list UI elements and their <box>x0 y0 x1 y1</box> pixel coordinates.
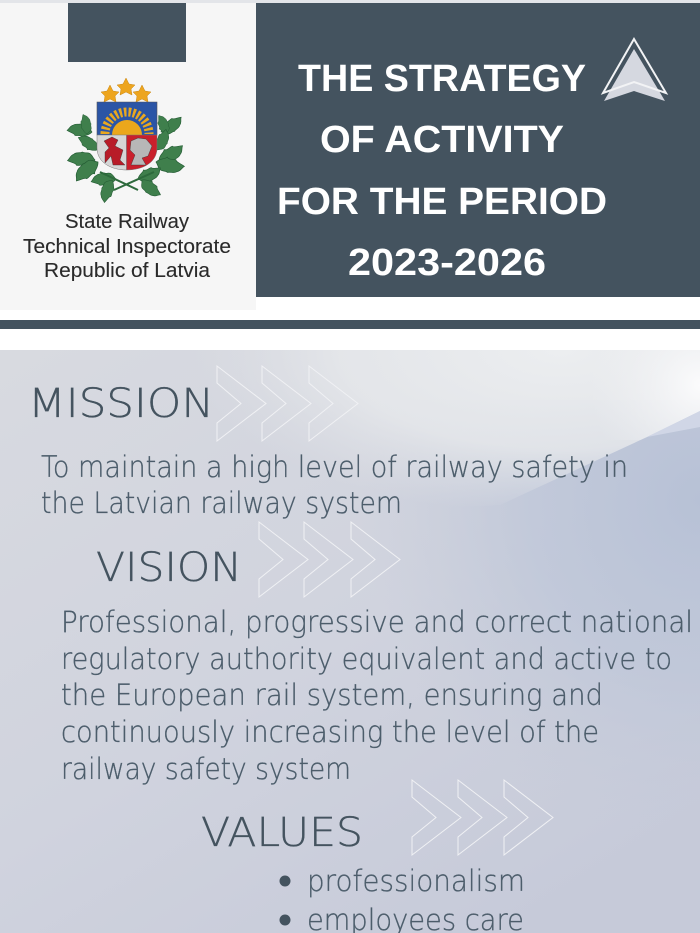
mission section <box>28 366 628 520</box>
icon: arrow <box>603 39 666 101</box>
oak branches <box>66 114 186 204</box>
shield blue field <box>97 102 157 135</box>
vision section <box>61 522 693 786</box>
title: FOR THE PERIOD <box>277 181 607 223</box>
heading: vision: VISION <box>96 545 242 591</box>
values section <box>201 780 553 933</box>
organisation name: Republic of Latvia <box>44 260 211 282</box>
shield red quarter <box>126 135 157 170</box>
title: OF ACTIVITY <box>320 119 564 161</box>
vision text: railway safety system <box>61 752 351 786</box>
organisation name <box>23 211 231 282</box>
panel: strategy content <box>0 350 700 933</box>
organisation name: Technical Inspectorate <box>23 236 231 258</box>
mission text: the Latvian railway system <box>41 486 402 520</box>
icon: chevrons <box>217 366 358 441</box>
mission text <box>41 450 628 520</box>
sun rays <box>105 112 149 134</box>
organisation name: State Railway <box>65 211 189 233</box>
vision text <box>61 605 693 786</box>
title: 2023-2026 <box>348 242 546 284</box>
heading: values: VALUES <box>201 810 363 856</box>
panel: logo <box>0 3 256 310</box>
vision text: continuously increasing the level of the <box>61 715 599 749</box>
sun <box>112 120 142 135</box>
title: THE STRATEGY <box>298 58 586 100</box>
panel: title <box>256 3 700 297</box>
title <box>277 58 607 284</box>
divider bar <box>0 320 700 329</box>
dark tab <box>68 3 186 62</box>
values list <box>280 864 525 933</box>
icon: chevrons <box>412 780 553 855</box>
top strip <box>0 0 700 3</box>
mission text: To maintain a high level of railway safety in <box>41 450 628 484</box>
icon: coat of arms <box>66 78 186 204</box>
silver griffin <box>130 138 152 165</box>
icon: chevrons <box>259 522 400 597</box>
vision text: the European rail system, ensuring and <box>61 678 603 712</box>
stars <box>101 78 151 102</box>
values list: professionalism <box>307 864 525 898</box>
heading: mission: MISSION <box>28 381 214 427</box>
red lion <box>104 137 125 165</box>
shield silver quarter <box>97 135 126 170</box>
